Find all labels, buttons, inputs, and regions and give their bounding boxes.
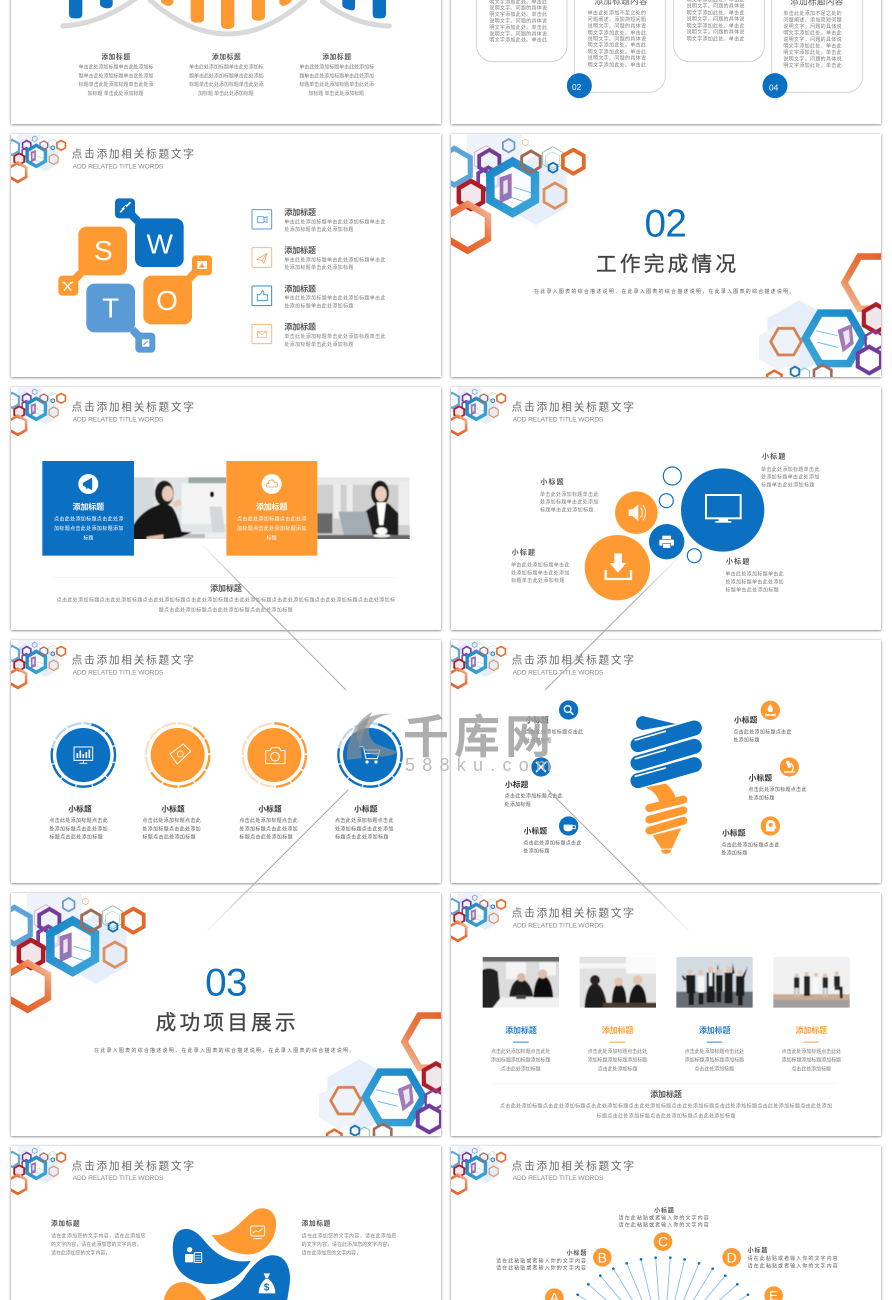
hexagon decoration top-left: [0, 878, 144, 1010]
card 02: [574, 0, 665, 92]
label: left 3: 处添加标题: [523, 848, 549, 855]
node C with label: 请在此粘贴或者输入你的文字内容: [619, 1214, 709, 1221]
label: right 2: 点击此处添加标题点击此: [748, 786, 806, 793]
caption column 1: [79, 52, 153, 97]
petal: blue left: [173, 1229, 251, 1284]
photo 3: cheering group: [676, 957, 753, 1008]
caption column 3: 标题单击此处添加标题单击此处添: [299, 81, 374, 88]
card 04: 明文字添加此处。单击此: [783, 42, 842, 49]
orange card: 标题: [267, 534, 277, 541]
round icon 1: chart monitor: [45, 716, 122, 794]
card 04: 明文字添加此处。单击此: [783, 49, 842, 56]
slide heading: [512, 1159, 634, 1182]
header decoration: hexagons: [6, 381, 65, 435]
caption 4: 标题点击此处添加标题: [335, 834, 388, 841]
text block left: [51, 1218, 146, 1257]
bubble: monitor: [681, 468, 764, 552]
node C with label: 请在此粘贴或者输入你的文字内容: [619, 1222, 709, 1229]
slide heading: [512, 906, 634, 929]
list item 1: 添加标题: [284, 207, 316, 217]
photo caption 1: 添加标题: [505, 1025, 537, 1035]
label: right 3: 点击此处添加标题点击此: [721, 841, 779, 848]
section title: 成功项目展示: [156, 1012, 296, 1035]
slide heading: ADD RELATED TITLE WORDS: [513, 416, 604, 423]
badge 04: [762, 73, 787, 98]
card 03: 说明文字。问题的具体说: [687, 16, 744, 23]
icon: magnifier: [559, 700, 578, 720]
caption below photos: 点击此处添加标题点击此处添加标题点击此处添加标题点击此处添加标题点击此处添加标题点击此处添加标题点击此处添加标题点击此处添加标: [57, 597, 395, 604]
orange card: 点击此处添加标题点击此处添: [237, 515, 306, 522]
label: lower right: [725, 556, 784, 593]
caption column 2: 标题单击此处添加标题单击此处添: [189, 81, 264, 88]
label: left 3: 小标题: [524, 825, 547, 835]
header decoration: hexagons: [446, 381, 505, 435]
caption 1: 点击此处添加标题点击此: [49, 817, 108, 824]
list item 1: 处添加标题单击此处添加标题: [284, 226, 353, 233]
card 03: 说明文字。问题的具体说: [687, 29, 744, 36]
node B with label: 请在此粘贴或者输入你的文字内容: [496, 1265, 586, 1272]
watermark diagonal lines: [197, 540, 693, 935]
caption 4: 点击此处添加标题点击此: [335, 817, 393, 824]
outline circles: [659, 467, 701, 563]
section title: 工作完成情况: [596, 253, 736, 276]
DNA helix illustration: [63, 0, 389, 34]
petal: orange top: [212, 1208, 276, 1254]
list item 3: [252, 283, 385, 310]
text block right: 请在此添加您的文字内容，请在此添加您: [302, 1233, 396, 1240]
slide heading: [72, 1159, 194, 1182]
slide heading: [512, 400, 634, 423]
card 02: 问题阐述、添加简短问题: [588, 16, 646, 23]
label: right 2: 小标题: [749, 772, 772, 782]
slide: four round icons: [6, 634, 441, 883]
section number: 03: [205, 962, 247, 1005]
round icon 3: camera: [243, 723, 306, 787]
caption 4: 处添加标题点击此处添加: [335, 825, 393, 832]
text block right: [302, 1218, 396, 1257]
label: lower left: 处添加标题单击此处添加: [511, 569, 569, 576]
label: left 1: [525, 715, 583, 744]
label: left 1: 点击此处添加标题点击此: [525, 729, 583, 736]
slide heading: [72, 400, 194, 423]
slide heading: 点击添加相关标题文字: [72, 147, 194, 160]
caption column 2: 加标题 单击此处添加标题: [198, 90, 254, 97]
photo 4: seated group: [773, 957, 850, 1008]
slide heading: ADD RELATED TITLE WORDS: [73, 669, 164, 676]
photo caption 3: 点击此处添加标题: [694, 1066, 734, 1073]
caption 2: 点击此处添加标题点击此: [142, 817, 201, 824]
slide heading: 点击添加相关标题文字: [72, 653, 194, 666]
caption 3: [239, 803, 298, 841]
caption column 3: [299, 52, 374, 97]
header decoration: hexagons: [6, 634, 65, 688]
card 01: 说明文字。问题的具体说: [489, 30, 547, 37]
card 02: 单击此处添加不足之处的: [588, 9, 646, 16]
caption 4: 小标题: [354, 803, 378, 813]
text block right: 请在此添加您的文字内容，: [302, 1250, 361, 1257]
caption column 1: 题单击此处添加标题单击此处添加: [79, 72, 153, 79]
card 03: 说明文字。问题的具体说: [687, 3, 744, 10]
bubble: speaker: [615, 491, 658, 534]
label: lower left: 单击此处添加标题单击此: [511, 561, 569, 568]
slide: bubble chart: [446, 381, 881, 630]
photo 1: meeting: [482, 957, 559, 1008]
label: lower left: [511, 547, 569, 584]
icon: campfire: [761, 701, 780, 720]
block O: O: [156, 285, 178, 316]
photo caption 2: 添加标题添加标题添加标题: [588, 1057, 647, 1064]
card 01: 明文字添加此处。单击此: [489, 11, 547, 18]
card 03: 明文字添加此处。单击此: [687, 9, 744, 16]
caption below photos: 添加标题: [210, 583, 242, 593]
blue card: 点击此处添加标题点击此处添: [54, 515, 123, 522]
card 02: 明文字添加此处。单击此: [588, 48, 646, 55]
caption 2: 小标题: [161, 803, 185, 813]
blue card: 加标题点击此处添加标题添加: [54, 525, 123, 532]
card 01: 说明文字。问题的具体说: [489, 5, 547, 12]
block T: T: [102, 292, 119, 323]
list item 2: 处添加标题单击此处添加标题: [284, 264, 353, 271]
photo caption 1: 点击此处添加标题点击此处: [491, 1048, 550, 1055]
label: top right: 单击此处添加标题单击此: [761, 466, 819, 473]
blue card: 添加标题: [72, 501, 104, 511]
node D with label: 请在此粘贴或者输入你的文字内容: [748, 1255, 838, 1262]
caption 3: 小标题: [258, 803, 282, 813]
label: top right: 小标题: [762, 452, 785, 461]
label: lower right: 小标题: [726, 556, 749, 565]
card 04: 问题阐述、添加简短问题: [783, 17, 842, 24]
label: left 2: 处添加标题: [505, 801, 531, 808]
icon: microscope: [780, 757, 799, 777]
photo caption 2: 点击此处添加标题: [598, 1066, 637, 1073]
hexagon decoration bottom-right: [319, 1016, 464, 1146]
photo caption 4: 添加标题: [795, 1025, 827, 1035]
list item 3: 添加标题: [284, 283, 316, 293]
card 01: [477, 0, 567, 62]
slide heading: [512, 653, 634, 676]
orange card: 加标题点击此处添加标题添加: [237, 525, 306, 532]
card 03: [674, 0, 764, 62]
block S: S: [94, 235, 113, 266]
petal: orange bottom: [163, 1282, 208, 1300]
caption below photos: 题点击此处添加标题点击此处添加标题点击此处添加标题: [159, 607, 293, 614]
bubble: printer: [649, 524, 684, 559]
caption column 3: 添加标题: [322, 52, 351, 61]
SWOT diagram: [58, 198, 212, 353]
slide heading: ADD RELATED TITLE WORDS: [73, 416, 164, 423]
caption 1: [49, 803, 108, 841]
block T: [86, 284, 155, 353]
label: right 3: [721, 827, 779, 857]
list item 4: 单击此处添加标题单击此处添加标题单击此: [284, 333, 385, 340]
radial lines with dots: [576, 1256, 749, 1300]
slide: SWOT: [6, 128, 441, 377]
node B with label: 请在此粘贴或者输入你的文字内容: [496, 1257, 586, 1264]
label: right 1: 点击此处添加标题点击此: [733, 728, 791, 735]
label: lower right: 单击此处添加标题单击此: [725, 571, 784, 578]
node D with label: [722, 1247, 838, 1269]
orange card: [226, 461, 317, 556]
blue card: 标题: [83, 534, 93, 541]
caption 1: 标题点击此处添加标题: [49, 834, 103, 841]
photo caption 2: [588, 1025, 647, 1073]
slide heading: 点击添加相关标题文字: [512, 400, 634, 413]
petal: blue right: $: [264, 1283, 270, 1294]
caption column 2: 添加标题: [212, 52, 241, 61]
caption 2: 处添加标题点击此处添加: [142, 825, 201, 832]
watermark: 588ku logo and text: 588ku.com: [405, 755, 551, 775]
slide: light bulb: [446, 634, 881, 883]
text block right: 添加标题: [302, 1218, 331, 1227]
label: upper left: 处添加标题单击此处添加: [540, 499, 598, 506]
node B with label: [496, 1248, 612, 1272]
card 02: 说明文字。问题的具体说: [588, 23, 646, 30]
list item 2: [252, 245, 385, 271]
block O: [143, 255, 212, 324]
photo caption 4: 点击此处添加标题: [791, 1066, 831, 1073]
slide heading: 点击添加相关标题文字: [512, 1159, 634, 1172]
photo caption 1: 添加标题添加标题添加标题: [491, 1057, 550, 1064]
badge 02: 02: [572, 82, 582, 92]
label: upper left: 标题单击此处添加标题: [540, 507, 593, 514]
slide heading: ADD RELATED TITLE WORDS: [513, 1175, 604, 1182]
photo caption 3: 添加标题: [699, 1025, 730, 1035]
header decoration: hexagons: [6, 1140, 65, 1194]
caption below photos: [54, 577, 398, 614]
card 04: 明文字添加此处。单击此: [783, 30, 842, 37]
slide heading: 点击添加相关标题文字: [72, 1159, 194, 1172]
round icon 4: shopping cart: [331, 716, 409, 794]
slide heading: 点击添加相关标题文字: [512, 653, 634, 666]
card 04: 说明文字。问题的具体说: [783, 36, 842, 43]
petal: blue right: [207, 1255, 290, 1300]
slide: DNA chart (cropped): [11, 0, 441, 124]
list item 4: 添加标题: [284, 322, 316, 332]
caption 2: 标题点击此处添加标题: [142, 834, 196, 841]
summary caption: [494, 1083, 838, 1120]
photo caption 1: 点击此处添加标题: [501, 1066, 541, 1073]
list item 1: 单击此处添加标题单击此处添加标题单击此: [284, 218, 385, 225]
card 04: 明文字添加此处。单击此: [783, 62, 842, 69]
caption 1: 处添加标题点击此处添加: [49, 825, 108, 832]
slide heading: ADD RELATED TITLE WORDS: [73, 1175, 164, 1182]
caption column 1: 添加标题: [101, 52, 130, 61]
label: right 1: [733, 714, 791, 744]
label: left 1: 小标题: [525, 715, 549, 725]
summary caption: 点击此处添加标题点击此处添加标题点击此处添加标题点击此处添加标题点击此处添加标题点击此处添加标题点击此处添加标题点击此处添加: [500, 1103, 832, 1110]
node D with label: 小标题: [748, 1247, 767, 1255]
header decoration: hexagons: [446, 634, 505, 688]
section number: 02: [644, 203, 687, 246]
blue card: [42, 461, 134, 556]
label: upper left: 单击此处添加标题单击此: [540, 491, 598, 498]
list item 2: 单击此处添加标题单击此处添加标题单击此: [284, 256, 385, 263]
icon: head: [761, 816, 780, 836]
label: left 3: 点击此处添加标题点击此: [523, 839, 581, 846]
text block left: 请在此添加您的文字内容，: [51, 1250, 110, 1257]
block W: [115, 198, 184, 267]
node D with label: D: [727, 1249, 737, 1265]
caption 3: 点击此处添加标题点击此: [239, 817, 298, 824]
card 02: 明文字添加此处。单击此: [588, 29, 646, 36]
card 04: 说明文字。问题的具体说: [783, 55, 842, 62]
slide: petal diagram: [6, 1140, 441, 1300]
light bulb illustration: [635, 716, 694, 854]
slide heading: 点击添加相关标题文字: [512, 906, 634, 919]
photo caption 3: [685, 1025, 744, 1073]
icon: coffee cup: [559, 816, 578, 836]
text block right: 的文字内容，请在此添加您的文字内容，: [302, 1241, 392, 1248]
slide heading: 点击添加相关标题文字: [72, 400, 194, 413]
badge 04: 04: [769, 83, 779, 93]
header decoration: hexagons: [446, 1140, 505, 1194]
card 02: 明文字添加此处。单击此: [588, 61, 646, 68]
card 03: 明文字添加此处。单击此: [687, 22, 744, 29]
label: left 1: 处添加标题: [525, 737, 551, 744]
card 04: 说明文字。问题的具体说: [783, 23, 842, 30]
slide heading: ADD RELATED TITLE WORDS: [513, 669, 604, 676]
hexagon decoration bottom-right: [759, 257, 892, 387]
slide: team photos: [446, 887, 881, 1136]
watermark: 588ku logo and text: [347, 711, 551, 775]
badge 02: [567, 73, 592, 98]
label: lower right: 处添加标题单击此处添加: [725, 578, 784, 585]
list item 3: 处添加标题单击此处添加标题: [284, 303, 353, 310]
section description: 在此录入图表的综合描述说明，在此录入图表的综合描述说明，在此录入图表的综合描述说明。: [94, 1047, 354, 1054]
caption column 2: [189, 52, 264, 97]
label: upper left: [540, 477, 598, 514]
list item 4: [252, 322, 385, 348]
slide heading: ADD RELATED TITLE WORDS: [513, 922, 604, 929]
photo caption 3: 点击此处添加标题点击此处: [685, 1048, 744, 1055]
header decoration: hexagons: [446, 887, 505, 941]
caption 3: 处添加标题点击此处添加: [239, 825, 298, 832]
label: top right: 标题单击此处添加标题: [761, 481, 814, 488]
node A: [545, 1288, 564, 1300]
label: right 2: 处添加标题: [748, 795, 774, 802]
label: left 2: 小标题: [505, 779, 529, 789]
summary caption: 添加标题: [650, 1089, 682, 1099]
caption column 3: 加标题 单击此处添加标题: [308, 90, 364, 97]
card 02: 说明文字。问题的具体说: [588, 55, 646, 62]
slide: numbered cards (cropped): [451, 0, 881, 124]
card 03: 明文字添加此处。单击此: [687, 35, 744, 42]
card 02: 明文字添加此处。单击此: [588, 42, 646, 49]
photo caption 2: 添加标题: [602, 1025, 633, 1035]
photo 2: discussion: [580, 957, 656, 1008]
section description: 在此录入图表的综合描述说明，在此录入图表的综合描述说明，在此录入图表的综合描述说明。: [534, 288, 794, 295]
slide: section 03: [0, 878, 464, 1146]
caption column 1: 标题单击此处添加标题单击此处添: [79, 81, 153, 88]
label: left 2: 点击此处添加标题点击此: [505, 793, 563, 800]
round icon 2: banknote: [134, 712, 221, 798]
slide: two photo cards: [6, 381, 441, 630]
node B with label: 小标题: [567, 1249, 586, 1257]
caption 1: 小标题: [68, 803, 92, 813]
text block left: 请在此添加您的文字内容，请在此添加您: [51, 1233, 146, 1240]
label: right 3: 处添加标题: [721, 850, 747, 857]
block S: [58, 227, 127, 296]
card 04: 单击此处添加不足之处的: [783, 10, 842, 17]
node C with label: 小标题: [654, 1206, 674, 1214]
photo: woman at computer: [134, 477, 226, 539]
caption column 2: 题单击此处添加标题单击此处添加: [189, 72, 264, 79]
slide heading: ADD RELATED TITLE WORDS: [73, 163, 164, 170]
slide heading: [72, 653, 194, 676]
node E: [764, 1286, 783, 1300]
caption 3: 标题点击此处添加标题: [239, 834, 293, 841]
slide: radial timeline: [446, 1140, 881, 1300]
card 04: [772, 0, 863, 92]
header decoration: hexagons: [6, 128, 65, 182]
photo caption 1: [491, 1025, 550, 1073]
caption column 3: 单击此处添加标题单击此处添加标: [299, 63, 374, 70]
slide: section 02: [438, 119, 892, 387]
label: right 1: 处添加标题: [733, 737, 759, 744]
label: top right: [761, 452, 819, 488]
photo caption 4: 添加标题添加标题添加标题: [782, 1057, 841, 1064]
photo caption 4: [782, 1025, 841, 1073]
node B with label: B: [598, 1249, 607, 1265]
slide heading: [72, 147, 194, 170]
card 01: 明文字添加此处。单击此: [489, 24, 547, 31]
card 01: 明文字添加此处。单击此: [489, 37, 547, 44]
caption column 2: 单击此处添加标题单击此处添加标: [189, 63, 264, 70]
label: left 2: [505, 779, 563, 808]
orange card: 添加标题: [256, 501, 287, 511]
label: top right: 处添加标题单击此处添加: [761, 474, 819, 481]
photo caption 2: 点击此处添加标题点击此处: [588, 1048, 647, 1055]
node D with label: 请在此粘贴或者输入你的文字内容: [748, 1262, 838, 1269]
caption column 3: 题单击此处添加标题单击此处添加: [299, 72, 374, 79]
label: right 2: [748, 772, 806, 802]
watermark: 588ku logo and text: 千库网: [403, 711, 551, 763]
card 01: 说明文字。问题的具体说: [489, 17, 547, 24]
label: left 3: [523, 825, 581, 855]
card 02: 说明文字。问题的具体说: [588, 35, 646, 42]
label: lower left: 标题单击此处添加标题: [511, 577, 564, 584]
list item 1: [252, 207, 385, 233]
photo caption 3: 添加标题添加标题添加标题: [685, 1057, 744, 1064]
text block left: 的文字内容，请在此添加您的文字内容，: [51, 1241, 142, 1248]
hexagon decoration top-left: [438, 119, 584, 251]
node C with label: [619, 1206, 709, 1251]
list item 2: 添加标题: [284, 245, 316, 255]
list item 3: 单击此处添加标题单击此处添加标题单击此: [284, 295, 385, 302]
caption column 1: 单击此处添加标题单击此处添加标: [79, 63, 153, 70]
list item 4: 处添加标题单击此处添加标题: [284, 341, 353, 348]
caption 4: [335, 803, 393, 841]
node C with label: C: [658, 1234, 668, 1250]
label: upper left: 小标题: [540, 477, 564, 486]
text block left: 添加标题: [51, 1218, 80, 1227]
photo: woman with laptop: [317, 478, 410, 539]
label: lower left: 小标题: [512, 547, 535, 556]
label: lower right: 标题单击此处添加标题: [725, 586, 779, 593]
summary caption: 标题点击此处添加标题点击此处添加标题点击此处添加标题: [597, 1113, 735, 1120]
block W: W: [146, 228, 173, 259]
bubble: download: [585, 535, 650, 600]
photo caption 4: 点击此处添加标题点击此处: [782, 1048, 841, 1055]
label: right 3: 小标题: [722, 827, 746, 837]
icon: tools: [531, 757, 551, 777]
caption column 1: 加标题 单击此处添加标题: [88, 90, 143, 97]
label: right 1: 小标题: [734, 714, 758, 724]
caption 2: [142, 803, 201, 841]
